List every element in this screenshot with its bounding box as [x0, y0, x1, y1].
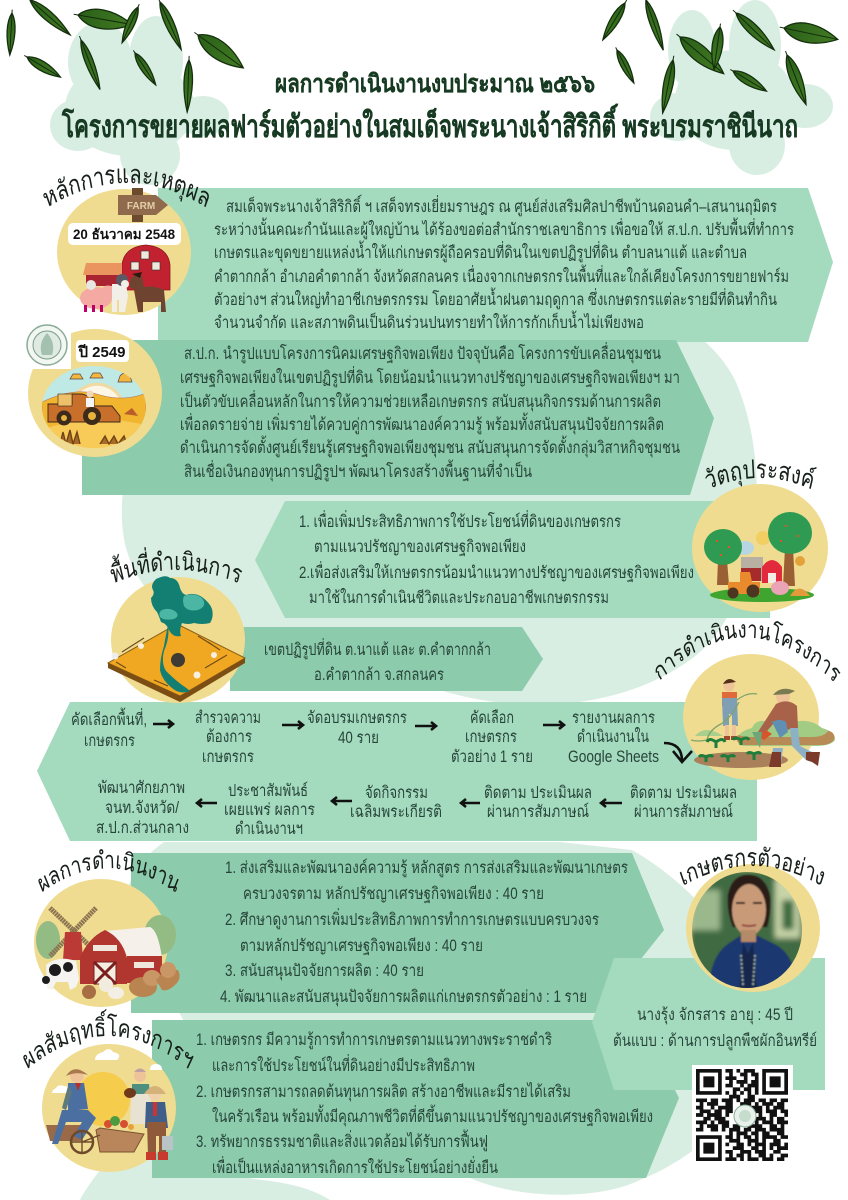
panel: history 2549	[82, 340, 714, 495]
text: results: ตามหลักปรัชญาเศรษฐกิจพอเพียง : 40 ราย	[240, 937, 483, 955]
flow step text: top row: รายงานผลการ	[572, 709, 655, 727]
flow step text: bottom row: จนท.จังหวัด/	[105, 799, 179, 817]
flow step text: top row: 40 ราย	[338, 729, 379, 747]
panel: outcomes	[152, 1020, 679, 1178]
flow step text: top row: เกษตรกร	[84, 732, 135, 750]
flow step text: bottom row: เผยแพร่ ผลการ	[224, 801, 315, 819]
heading: objectives: วัตถุประสงค์	[705, 459, 817, 489]
illustration: logo and tractor field	[24, 323, 162, 457]
text: outcomes	[196, 1031, 653, 1177]
panel: project area	[230, 627, 543, 691]
leaves: top-right cluster	[599, 0, 840, 114]
flow step text: top row: จัดอบรมเกษตรกร	[307, 709, 407, 727]
illustration: barn and windmill	[34, 879, 180, 1007]
flow step text: bottom row: ติดตาม ประเมินผล	[630, 784, 737, 802]
flow step text: bottom row: ประชาสัมพันธ์	[228, 781, 308, 800]
illustration: model farmer portrait	[686, 864, 820, 994]
flow step text: bottom row: ดำเนินงานฯ	[235, 820, 303, 838]
text: history: ดำเนินการจัดตั้งศูนย์เรียนรู้เศรษฐกิจพอเพียงชุมชน สนับสนุนการจัดตั้งกลุ่มวิสาหกิจชุมชน	[180, 435, 680, 458]
text: farmer name	[613, 1006, 817, 1051]
illustration: thailand map on field	[108, 576, 245, 703]
panel: process flow	[37, 702, 757, 841]
icon: tractor in field	[42, 366, 146, 450]
top-left paw blob	[50, 16, 229, 185]
text: objectives: 1. เพื่อเพิ่มประสิทธิภาพการใช้ประโยชน์ที่ดินของเกษตรกร	[299, 510, 621, 531]
text: results: 1. ส่งเสริมและพัฒนาองค์ความรู้ หลักสูตร การส่งเสริมและพัฒนาเกษตร	[225, 858, 628, 878]
flow step text: bottom row: ผ่านการสัมภาษณ์	[634, 802, 733, 821]
illustration: farmers with cart	[42, 1044, 176, 1172]
panel: principles and rationale	[158, 188, 833, 342]
flow step text: top row: ต้องการ	[206, 728, 252, 746]
text: outcomes: 2. เกษตรกรสามารถลดต้นทุนการผลิต สร้างอาชีพและมีรายได้เสริม	[196, 1082, 571, 1102]
icon: agency seal	[24, 323, 71, 369]
panel: model farmer info	[592, 958, 825, 1090]
text: results: 3. สนับสนุนปัจจัยการผลิต : 40 ราย	[225, 962, 424, 981]
heading: results: ผลการดำเนินงาน	[38, 849, 179, 892]
text: objectives: ตามแนวปรัชญาของเศรษฐกิจพอเพียง	[314, 538, 526, 556]
heading: outcomes: ผลสัมฤทธิ์โครงการฯ	[23, 1009, 194, 1069]
heading: principles: หลักการและเหตุผล	[43, 168, 209, 207]
text: results: 4. พัฒนาและสนับสนุนปัจจัยการผลิตแก่เกษตรกรตัวอย่าง : 1 ราย	[220, 988, 587, 1007]
leaves: top-left cluster	[6, 0, 249, 112]
heading: area: พื้นที่ดำเนินการ	[110, 547, 242, 582]
flow step text: bottom row: ส.ป.ก.ส่วนกลาง	[96, 819, 189, 837]
text: farmer name: นางรุ้ง จักรสาร อายุ : 45 ปี	[637, 1006, 793, 1025]
text: area: เขตปฏิรูปที่ดิน ต.นาแต้ และ ต.คำตากกล้า	[264, 638, 491, 660]
year label: ปี 2549	[78, 344, 126, 361]
text: outcomes: 1. เกษตรกร มีความรู้การทำการเกษตรตามแนวทางพระราชดำริ	[196, 1031, 552, 1050]
text: objectives: มาใช้ในการดำเนินชีวิตและประกอบอาชีพเกษตรกรรม	[309, 588, 609, 607]
illustration: farm and date	[57, 188, 191, 315]
flow step text: top row: ตัวอย่าง 1 ราย	[451, 748, 533, 766]
text: area: อ.คำตากล้า จ.สกลนคร	[314, 666, 444, 684]
text: outcomes: ในครัวเรือน พร้อมทั้งมีคุณภาพชีวิตที่ดีขึ้นตามแนวปรัชญาของเศรษฐกิจพอเพียง	[212, 1104, 653, 1127]
text: results: 2. ศึกษาดูงานการเพิ่มประสิทธิภาพการทำการเกษตรแบบครบวงจร	[225, 908, 599, 930]
flow step text: top row: คัดเลือก	[470, 709, 514, 727]
text: rationale: จำนวนจำกัด และสภาพดินเป็นดินร่วนปนทรายทำให้การกักเก็บน้ำไม่เพียงพอ	[214, 310, 644, 332]
central blob	[122, 259, 757, 705]
flow step text: bottom row: พัฒนาศักยภาพ	[98, 779, 185, 797]
flow step text: top row: เกษตรกร	[465, 728, 517, 746]
flow step text: top row: สำรวจความ	[195, 709, 261, 727]
flow step text: bottom row: จัดกิจกรรม	[365, 784, 428, 802]
flow step text: bottom row: ติดตาม ประเมินผล	[484, 784, 592, 802]
text: history: เศรษฐกิจพอเพียงในเขตปฏิรูปที่ดิน โดยน้อมนำแนวทางปรัชญาของเศรษฐกิจพอเพียงฯ มา	[180, 366, 680, 388]
illustration: farmers planting	[683, 654, 835, 780]
text: objectives: 2.เพื่อส่งเสริมให้เกษตรกรน้อมนำแนวทางปรัชญาของเศรษฐกิจพอเพียง	[299, 561, 694, 582]
icon: yellow circle	[28, 329, 162, 457]
text: results	[220, 858, 628, 1007]
date label: 20 ธันวาคม 2548	[73, 226, 175, 242]
text: area	[264, 638, 491, 684]
flow step text: top row: Google Sheets	[568, 748, 659, 766]
title: ผลการดำเนินงานงบประมาณ ๒๕๖๖	[275, 70, 595, 98]
text: history: ส.ป.ก. นำรูปแบบโครงการนิคมเศรษฐกิจพอเพียง ปัจจุบันคือ โครงการขับเคลื่อนชุมชน	[184, 342, 661, 364]
top-right paw blob	[650, 0, 833, 175]
text: history	[180, 342, 680, 482]
flow step text: bottom row: ผ่านการสัมภาษณ์	[487, 802, 589, 821]
flow arrows	[153, 720, 692, 807]
text: outcomes: 3. ทรัพยากรธรรมชาติและสิ่งแวดล้อมได้รับการฟื้นฟู	[196, 1129, 488, 1152]
flow step text: top row: เกษตรกร	[202, 748, 254, 766]
QR code	[692, 1065, 793, 1165]
flow step text: top row	[71, 707, 659, 766]
flow step text: bottom row	[96, 779, 737, 838]
text: results: ครบวงจรตาม หลักปรัชญาเศรษฐกิจพอเพียง : 40 ราย	[243, 885, 544, 903]
text: outcomes: และการใช้ประโยชน์ในที่ดินอย่างมีประสิทธิภาพ	[212, 1054, 475, 1075]
text: history: สินเชื่อเงินกองทุนการปฏิรูปฯ พัฒนาโครงสร้างพื้นฐานที่จำเป็น	[184, 459, 532, 482]
icon: farm sign: FARM	[127, 201, 155, 212]
flow step text: top row: ดำเนินงานใน	[577, 727, 649, 746]
flow step text: top row: คัดเลือกพื้นที่,	[71, 707, 147, 729]
text: history: เป็นตัวขับเคลื่อนหลักในการให้ความช่วยเหลือเกษตรกร สนับสนุนกิจกรรมด้านการผลิต	[180, 390, 661, 412]
panel: objectives	[255, 501, 770, 618]
text: history: เพื่อลดรายจ่าย เพิ่มรายได้ควบคู่การพัฒนาองค์ความรู้ พร้อมทั้งสนับสนุนปัจจัยการผลิต	[180, 412, 664, 435]
illustration: objectives trees	[692, 484, 828, 612]
text: rationale	[214, 194, 794, 332]
heading: model farmer: เกษตรกรตัวอย่าง	[680, 846, 824, 885]
title	[61, 70, 798, 144]
curved headings	[23, 168, 840, 1069]
heading: operations: การดำเนินงานโครงการ	[656, 621, 840, 681]
lower blob	[80, 842, 764, 1200]
text: objectives	[299, 510, 694, 607]
icon: barn and animals	[80, 245, 170, 312]
panel: results	[131, 853, 664, 1013]
flow step text: bottom row: เฉลิมพระเกียรติ	[350, 803, 442, 821]
text: outcomes: เพื่อเป็นแหล่งอาหารเกิดการใช้ประโยชน์อย่างยั่งยืน	[212, 1156, 498, 1177]
